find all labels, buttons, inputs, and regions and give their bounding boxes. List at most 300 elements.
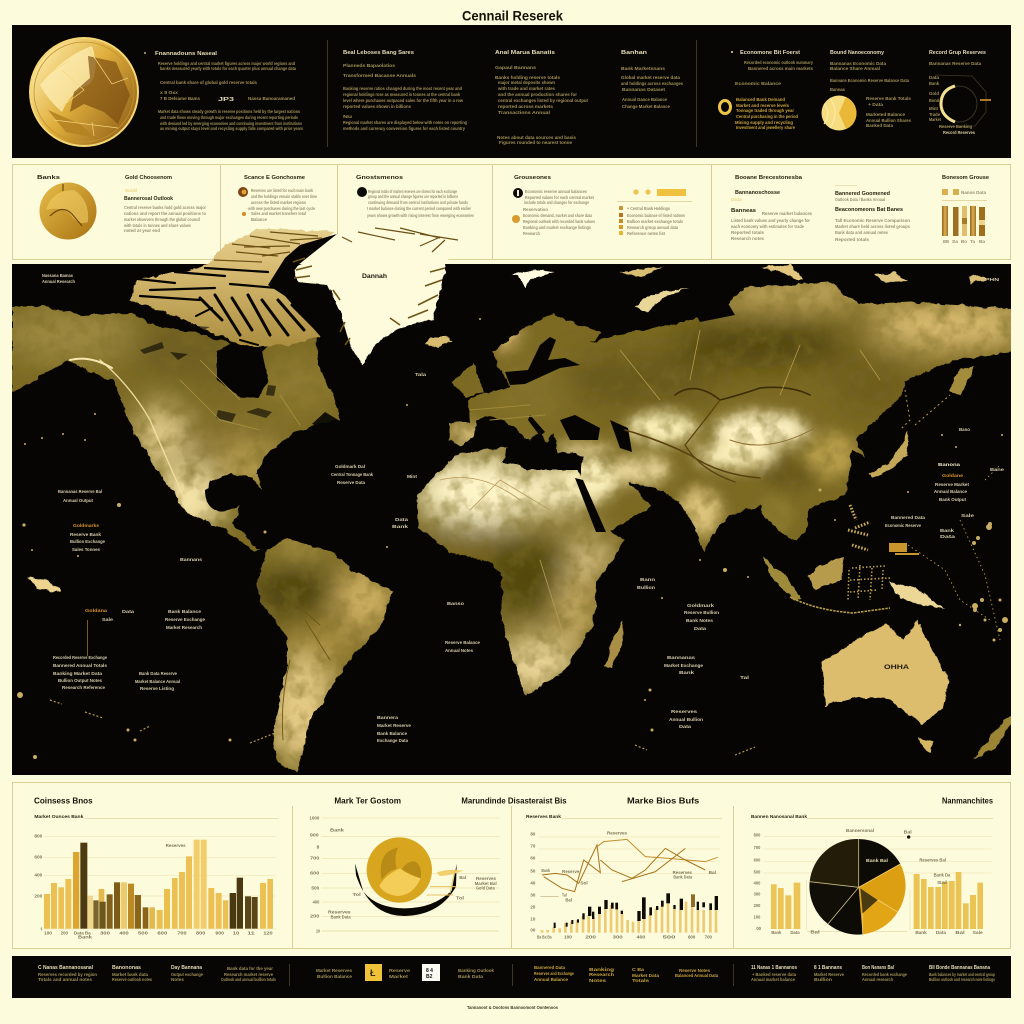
text block: column five with ring icon: Balanced Bank Demand <box>736 97 785 102</box>
map labels: place names: Bann <box>640 577 655 582</box>
map labels: place names: Banso <box>447 601 464 606</box>
panel: bottom black notes band: Reserve outlook notes <box>112 977 152 982</box>
map labels: place names: Data <box>395 517 409 522</box>
chart: column chart left: 600 <box>34 855 43 860</box>
panel: bottom black notes band: C Ba <box>632 967 645 972</box>
chart: circular gauge: Record Reserves <box>943 130 975 135</box>
card: legend and notes: + Central Bank Holdings <box>627 206 670 211</box>
card: bank share notes: across the listed market regions <box>251 200 306 205</box>
card: outlook notes: Gnostsmenos <box>356 175 403 181</box>
chart: gold coin scale: 500 <box>311 885 320 890</box>
chart: pie with side columns: Bank Bal <box>866 858 889 864</box>
icon: black badge <box>513 188 523 198</box>
text block: column five with ring icon: Central purchasing in the period <box>736 114 798 119</box>
chart: line and column combo: 50 <box>530 868 536 873</box>
chart: line and column combo: Bal <box>709 870 716 875</box>
card: research report: Tall Economic Reserve Comparison <box>835 218 910 223</box>
chart: pie with side columns <box>751 797 994 935</box>
text block: column two <box>343 50 467 131</box>
text block: column two: Planneds Bapaolatios <box>343 63 396 68</box>
card: gold coin overview <box>37 175 206 240</box>
chart: line and column combo: Sol <box>580 880 588 885</box>
icon: white square badge <box>422 964 440 981</box>
text block: column one: banks measured yearly with totals for each quarter plus annual change data <box>160 66 296 71</box>
map labels: place names: Sale <box>961 513 975 518</box>
chart: pie with side columns: 700 <box>754 845 761 850</box>
chart: line and column combo: 400 <box>637 935 646 940</box>
map labels: place names: Bannanas <box>667 655 696 660</box>
card: research report: Data <box>731 197 743 202</box>
chart: pie with side columns: 400 <box>754 881 761 886</box>
map labels: place names: Dannah <box>362 273 387 280</box>
map labels: place names: Bannanas Reserve Bal <box>58 489 102 494</box>
map labels: place names: Goldmarks <box>73 523 100 528</box>
chart: column chart left: 200 <box>34 893 43 898</box>
chart: line and column combo: Tal <box>562 893 567 898</box>
text block: column one: Nassa Banoaramaned <box>248 96 295 101</box>
map labels: place names: Bank <box>679 670 695 675</box>
chart: pie with side columns: Data <box>936 930 947 935</box>
chart: column chart left: 10 <box>233 930 240 935</box>
text block: column one: Central bank share of global gold reserve totals <box>160 80 258 85</box>
title: Cennail Reserek <box>462 8 563 24</box>
panel: bottom black notes band: 8 1 Bannans <box>814 965 842 971</box>
text block: column two: Banking reserve ratios changed during the most recent year and <box>343 86 462 91</box>
chart: column chart left: 100 <box>44 930 53 935</box>
chart: gold coin scale: 400 <box>313 899 320 904</box>
map labels: place names: Economic Reserve <box>885 523 922 528</box>
chart: column chart left: Market Ounces Bank <box>34 814 84 820</box>
icon: black medal <box>357 187 367 197</box>
map labels: place names: Market Exchange <box>664 663 704 668</box>
panel: bottom black notes band: Day Bannana <box>171 965 202 971</box>
map labels: place names: Bannera <box>377 715 399 720</box>
map labels: place names: Reserve Data <box>337 480 366 485</box>
map labels: place names: Market Balance Annual <box>135 679 180 684</box>
map labels: place names: Reserves <box>671 709 698 714</box>
map labels: place names: Reserve Bullion <box>684 610 719 615</box>
panel: bottom black notes band: Market Reserves <box>316 968 353 973</box>
text block: column three: Notes about data sources and basis <box>497 135 577 140</box>
chart: gold ingot bars: Ta <box>970 239 976 244</box>
icon: gold coin <box>40 182 96 240</box>
panel: bottom black notes band: Market bank data <box>112 972 149 977</box>
card: legend and notes: Reservation <box>523 207 548 212</box>
card: legend and notes: Grouseones <box>514 175 551 181</box>
map labels: place names: Central Tonnage Bank <box>331 472 373 477</box>
chart: pie with side columns: 00 <box>756 926 762 931</box>
map: Australia <box>822 620 949 724</box>
chart: pie with side columns: Bank <box>771 930 782 935</box>
chart: gold coin scale: 600 <box>310 871 320 876</box>
card: legend and notes: Regional outlook with recorded bank values <box>523 219 595 224</box>
text block: column two: Transformed Bacanse Annuals <box>343 73 417 78</box>
chart: gold coin scale: 10 <box>316 928 320 933</box>
map: Arctic coast hatch over panel <box>214 228 458 345</box>
map labels: place names: Exchange Data <box>377 738 409 743</box>
card: bank share notes: Sales and market transfers total <box>251 211 306 216</box>
map: seas and lakes <box>140 290 735 532</box>
icon: gold ring <box>720 100 730 114</box>
card: research report <box>731 175 911 242</box>
map labels: place names: Data <box>694 626 707 631</box>
text block and pie: column six: Balance Share Annual <box>830 66 880 71</box>
map: Greenland <box>293 226 453 365</box>
chart: line and column combo: 80 <box>530 831 536 836</box>
map labels: place names: Tal <box>740 675 749 680</box>
card: outlook notes: continuing demand from central institutions and private funds <box>368 200 468 205</box>
panel: bottom black notes band: Research market reserve <box>224 972 274 977</box>
panel: bottom black notes band: BII Bonde Bannanas Banana <box>929 965 990 971</box>
chart: gold coin scale: 900 <box>310 832 319 837</box>
map labels: place names: Bannered Data <box>891 515 926 520</box>
map labels: place names: Data <box>679 724 692 729</box>
map: Indonesian and Pacific island chain <box>50 390 1000 755</box>
text block and pie: column six: Reserve Bank Totals <box>866 96 912 101</box>
card: research report: Listed bank values and yearly change for <box>731 218 810 223</box>
map labels: place names: Reserve Bank <box>70 532 102 537</box>
panel: world map background <box>12 264 1011 775</box>
chart: line and column combo: 20 <box>530 904 536 909</box>
card: legend and notes: include totals and changes for exchange <box>524 200 589 205</box>
text block: column five with ring icon: Bannered across main markets <box>748 66 814 71</box>
chart: column chart left: 900 <box>215 930 225 935</box>
map labels: place names: Market Reserve <box>377 723 412 728</box>
panel: bottom black notes band: Outlook and annual bullion totals <box>221 977 276 982</box>
chart: column chart left: 500 <box>138 930 149 935</box>
panel: bottom black notes band: Notes <box>171 977 185 982</box>
chart: gold ingot bars: BB <box>943 239 949 244</box>
map labels: place names: Reserve Exchange <box>165 617 206 622</box>
chart: gold ingot bars: Bonesom Grouse <box>942 175 989 181</box>
text block: column three: Gapaul Bannans <box>495 65 537 70</box>
chart: circular gauge: Mint <box>929 106 939 111</box>
card: bank share notes: Scance E Gonchosme <box>244 175 305 181</box>
map labels: place names: PHN <box>985 277 999 282</box>
chart: pie with side columns: 600 <box>754 858 761 863</box>
map labels: place names: Goldmark <box>687 603 715 608</box>
chart: gold ingot bars: Nanos Data <box>961 190 987 195</box>
card: gold coin overview: market observers through the global council <box>124 217 200 222</box>
map labels: place names: Bullion Output Notes <box>58 678 103 683</box>
chart: column chart left: Coinsess Bnos <box>34 797 93 806</box>
chart: column chart left: Reserves <box>166 843 186 848</box>
text block: column five with ring icon <box>720 50 814 130</box>
text block: column five with ring icon: Mining supply and recycling <box>735 120 793 125</box>
panel: bottom black notes band: Annual market balance <box>751 977 796 982</box>
panel: bottom black notes band: Bon Nanans Bal <box>862 965 895 971</box>
chart: line and column combo: 40 <box>530 880 536 885</box>
chart: line and column combo: Reserve <box>562 869 580 874</box>
text block: column five with ring icon: Investment and jewellery share <box>736 125 795 130</box>
panel: bottom black notes band: C Nanas Bannanosanal <box>38 965 94 971</box>
chart: gold coin scale: 1000 <box>309 815 320 820</box>
map labels: place names: Research Reference <box>62 685 106 690</box>
chart: column chart left: 300 <box>100 930 111 935</box>
card: gold coin overview: Gold Choosenom <box>125 175 172 181</box>
text block: column three: Banks holding reserve totals <box>495 75 561 80</box>
chart: gold coin scale: Reserves <box>328 909 351 914</box>
panel: bottom black notes band: + Banked reserve data <box>752 972 797 977</box>
card: legend and notes: Reference notes list <box>627 231 665 236</box>
card: gold coin overview: with totals in tonnes and share values <box>123 223 191 228</box>
panel: bottom black notes band: Market <box>389 974 409 979</box>
panel: top black summary band <box>12 25 1011 158</box>
chart: pie with side columns: 100 <box>754 914 761 919</box>
chart: gold coin scale: Gold Data <box>476 886 495 891</box>
chart: circular gauge: Market <box>929 117 941 122</box>
chart: circular gauge: Gold <box>929 91 939 96</box>
text block: column three: with trade and market rates <box>497 86 556 91</box>
chart: line and column combo: 600 <box>688 935 696 940</box>
chart: pie with side columns: 500 <box>754 869 761 874</box>
map labels: place names: OHHA <box>884 664 909 671</box>
panel: bottom black notes band: Market Data <box>632 973 660 978</box>
text block and pie: column six: Banked Data <box>866 123 894 128</box>
panel: bottom black notes band: Reserves recorded by region <box>38 972 97 977</box>
panel: bottom black notes band: Reserves and Exchange <box>534 971 574 976</box>
chart: pie with side columns: Bannen Nanosanal Bank <box>751 814 807 820</box>
chart: column chart left: Bank <box>78 935 93 940</box>
map labels: place names <box>42 273 1005 743</box>
card: legend and notes: Economic reserve annual balances <box>525 189 587 194</box>
chart: pie with side columns: Bank <box>915 930 927 935</box>
panel: bottom black notes band: Research <box>589 972 614 977</box>
card: legend and notes: Economic demand, market and share data <box>523 213 592 218</box>
card: research report: Bannanoschosse <box>735 190 780 196</box>
card: gold coin overview: Central reserve banks hold gold across major <box>124 205 206 210</box>
map: Arctic archipelago <box>130 228 337 345</box>
text block: column one: JP3 <box>218 97 234 103</box>
icon: gold badge <box>512 215 520 223</box>
icon: large gold globe coin <box>30 38 138 146</box>
text block: column one: Reserve holdings and central market figures across major world regions and <box>158 61 295 66</box>
map labels: place names: Bullion <box>637 585 655 590</box>
chart: line and column combo: Ba Ba Ba <box>537 935 552 940</box>
card: legend and notes: Economic balance of listed nations <box>627 213 685 218</box>
map labels: place names: Data <box>122 609 135 614</box>
text block: column one: Market data shows steady growth in reserve positions held by the largest nations <box>158 109 300 114</box>
chart: column chart left: 400 <box>119 930 129 935</box>
map: mountain ridges and rivers <box>70 330 880 740</box>
panel: bottom black notes band: Reserve Notes <box>679 968 711 973</box>
chart: pie with side columns: Bal <box>810 929 820 934</box>
chart: line and column combo: 30 <box>530 893 536 898</box>
panel: bottom black notes band: Bank balances by market and central group <box>929 972 995 977</box>
chart: gold coin scale: Tol <box>456 896 464 901</box>
chart: gold coin scale: 200 <box>310 914 320 919</box>
text block and pie: column six: Bannans Economic Reserve Balance Data <box>830 78 909 83</box>
panel: bottom black notes band: Annual research <box>862 977 893 982</box>
chart: gold coin scale <box>309 797 499 933</box>
card: outlook notes: years shows growth with rising interest from emerging economies <box>367 213 474 218</box>
card: gold coin overview: nations and report the annual positions to <box>124 211 206 216</box>
text block: column two: methods and currency conversion figures for each listed country <box>343 126 465 131</box>
chart: pie with side columns: Data <box>790 930 800 935</box>
chart: line and column combo: 100 <box>564 935 573 940</box>
card: research report: Market share held across listed groups <box>835 224 911 229</box>
text block: column three: Anal Marua Banatis <box>495 50 555 56</box>
chart: line and column combo: 70 <box>530 844 536 849</box>
text block: column two: reported values shown in billions <box>343 104 412 109</box>
chart: pie with side columns: 200 <box>754 903 761 908</box>
map labels: place names: Nassana Bamas <box>42 273 74 278</box>
chart: pie with side columns: Bal <box>955 930 965 935</box>
chart: line and column combo: Marke Bios Bufs <box>627 797 700 806</box>
chart: column chart left: 0 <box>41 926 43 931</box>
chart: gold ingot bars: Sa <box>952 239 959 244</box>
text block and pie: column six <box>822 50 912 130</box>
map: Arctic channel streaks <box>138 268 315 345</box>
chart: line and column combo: Bal <box>565 897 572 902</box>
card: legend and notes: Bullion market exchange totals <box>627 219 683 224</box>
map labels: place names: Market Research <box>166 625 202 630</box>
text block: column three: major metal deposits shown <box>498 80 555 85</box>
chart: pie with side columns: Reserves Bal <box>919 858 946 863</box>
chart: gold coin scale: Reserves <box>476 876 497 881</box>
text block: column one: and trade flows moving through major exchanges during recent reporting periods <box>160 115 298 120</box>
text block and pie: column six: Bannanas Economic Data <box>830 61 887 66</box>
map: scattered island dots <box>17 318 1008 759</box>
text block: column two: Nu <box>343 114 352 119</box>
chart: column chart left <box>34 797 278 940</box>
icon: white square badge: 8 4 <box>426 968 433 974</box>
text block: column one: 7 B Delsame Bams <box>160 96 201 101</box>
card: gold coin overview: Bannerosal Outlook <box>124 196 173 202</box>
panel: bottom black notes band: Bullion outlook and research note listings <box>929 977 995 982</box>
text block: column five with ring icon: Economone Bit Foerst <box>740 50 800 56</box>
chart: pie with side columns: Bank Da <box>934 873 951 878</box>
map labels: place names: Bane <box>990 467 1005 472</box>
chart: line and column combo <box>461 797 722 940</box>
chart: pie with side columns: Nanmanchites <box>942 797 994 806</box>
panel: bottom black notes band: Balanced Annual Data <box>675 973 719 978</box>
chart: gold ingot bars: Ba <box>979 239 986 244</box>
chart: gold ingot bars: Bo <box>961 239 967 244</box>
text block: column one: Fnannadouns Naseal <box>155 51 218 57</box>
card: legend and notes <box>512 175 692 236</box>
chart: line and column combo: 700 <box>705 935 713 940</box>
card: research report: Booane Brecestonesba <box>735 175 803 181</box>
text block and pie: column six: Bannas <box>830 87 846 92</box>
chart: line and column combo: 10 <box>530 916 536 921</box>
text block: column two: regional holdings rose as measured in tonnes at the central bank <box>343 92 460 97</box>
map labels: place names: Bank <box>940 528 955 533</box>
text block: column five with ring icon: Economic Balance <box>735 81 782 86</box>
chart: pie with side columns: Sal <box>937 880 947 885</box>
chart: gold coin scale: 700 <box>310 856 320 861</box>
chart: gold coin scale: Tol <box>353 892 361 897</box>
card: research report: Outlook Data / Banks Annual <box>835 197 885 202</box>
chart: column chart left: 400 <box>34 872 43 877</box>
chart: circular gauge: Record Grup Reserves <box>929 50 986 56</box>
text block and pie: column six: + Data <box>868 102 884 107</box>
map labels: place names: Bannered Annual Totals <box>53 663 108 668</box>
icon: gold square badge <box>365 964 382 981</box>
chart: column chart left: 700 <box>177 930 187 935</box>
panel: bottom black notes band: Totals and annual notes <box>38 977 93 982</box>
map labels: place names: Banona <box>938 462 961 467</box>
chart: gold coin scale: Market Bal <box>475 881 497 886</box>
chart: column chart left: Data Ba <box>74 930 91 935</box>
map labels: place names: Bank <box>392 524 409 529</box>
chart: line and column combo: 00 <box>530 928 536 933</box>
panel: bottom black notes band: 11 Nanas 1 Bannanos <box>751 965 797 971</box>
text block and pie: column six: Bound Nanoeconomy <box>830 50 884 56</box>
card: outlook notes: Regional totals of market reserves are shown for each exchange <box>368 189 457 194</box>
map labels: place names: Reserve Market <box>935 482 970 487</box>
card: bank share notes: Balance <box>251 217 268 222</box>
map labels: place names: Sales Tonnes <box>72 547 101 552</box>
chart: line and column combo: 60 <box>530 856 536 861</box>
panel: bottom black notes band <box>12 956 1011 998</box>
chart: pie with side columns: Bal <box>904 829 912 834</box>
map labels: place names: Annual Output <box>63 498 94 503</box>
chart: column chart left: 120 <box>263 930 273 935</box>
chart: line and column combo: 300 <box>613 935 623 940</box>
map labels: place names: Bank Balance <box>377 731 408 736</box>
text block: column five with ring icon: Tonnage traded through year <box>736 108 794 113</box>
panel: bottom black notes band: Recorded bank exchange <box>862 972 907 977</box>
map labels: place names: Bano <box>959 427 970 432</box>
panel: bottom black notes band: Banking Outlook <box>458 968 495 973</box>
icon: bronze medal <box>238 187 248 197</box>
card: research report: Reported totals <box>731 230 765 235</box>
text block: column two: level where purchases outpaced sales for the fifth year in a row <box>343 98 464 103</box>
card: outlook notes: group and the annual change figures are reported in billions <box>368 194 458 199</box>
text block: column four: Annual Dance Balance <box>622 97 668 102</box>
chart: line and column combo: Reserves <box>607 830 628 835</box>
panel: bottom black notes band: Bullion <box>814 977 832 982</box>
chart: line and column combo: 200 <box>585 935 597 940</box>
text block: column five with ring icon: Recorded economic outlook summary <box>744 60 813 65</box>
panel: bottom black notes band: Banononas <box>112 965 141 971</box>
card: research report: Reserve market balances <box>762 211 813 216</box>
chart: line and column combo: Bank <box>541 868 550 873</box>
chart: circular gauge: Bank <box>929 81 940 86</box>
card: research report: Research notes <box>731 236 765 241</box>
panel: market charts band <box>12 782 1010 949</box>
map labels: place names: Goldmark Dal <box>335 464 365 469</box>
card: outlook notes: I market balance during the current period compared with earlier <box>367 206 471 211</box>
text block: column three: central exchanges listed by regional output <box>498 98 589 103</box>
card: research report: each economy with estimates for trade <box>731 224 804 229</box>
icon: white square badge: B2 <box>426 974 433 980</box>
card: gold coin overview: Gold <box>125 188 137 193</box>
pie: gold share <box>822 96 856 130</box>
chart: circular gauge: Bannanas Reserve Data <box>929 61 982 66</box>
text block: column four <box>621 50 684 109</box>
map labels: place names: Reserve Balance <box>445 640 481 645</box>
map labels: place names: Reserve Listing <box>140 686 174 691</box>
icon: gold square badge: Ł <box>370 968 376 978</box>
panel: bottom black notes band: Bank data for the year <box>227 966 273 971</box>
map labels: place names: Sale <box>102 617 114 622</box>
chart: pie with side columns: Bannersonal <box>846 828 874 833</box>
text block: column one: x 9 Oxx <box>160 90 179 95</box>
map: landmass colour field <box>0 260 1024 780</box>
text block: column one: as mining output stays level and recycling supply falls compared with prior years <box>160 126 303 131</box>
text block: column four: Bannanas Dataset <box>622 87 666 92</box>
card: legend and notes: Research <box>523 231 540 236</box>
text block: column two: Beal Leboses Bang Sares <box>343 50 414 56</box>
panel: bottom black notes band: Output exchange <box>171 972 203 977</box>
text block: column three: Figures rounded to nearest tonne <box>499 140 573 145</box>
text block: column three: Transactions Annual <box>498 110 550 115</box>
map labels: place names: Tala <box>415 372 427 377</box>
chart: line and column combo: Reserves <box>673 870 693 875</box>
map labels: place names: Goldana <box>85 608 108 613</box>
